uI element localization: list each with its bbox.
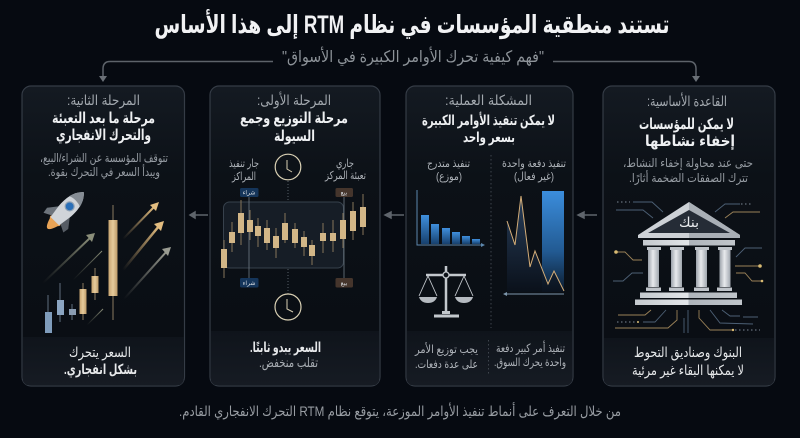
single batch note xyxy=(494,340,566,370)
title: تستند منطقية المؤسسات في نظام RTM إلى هذا الأساس xyxy=(154,9,669,40)
gradual note: على عدة دفعات. xyxy=(415,359,478,371)
label: gradual execution: تنفيذ متدرج xyxy=(427,158,470,170)
tag: sell top: بيع xyxy=(341,190,348,196)
stage one heading xyxy=(240,110,348,145)
stage two label: المرحلة الثانية: xyxy=(67,92,140,109)
chart: single batch spike xyxy=(503,191,564,296)
label: executing positions xyxy=(229,158,259,183)
tag: sell top xyxy=(336,188,353,197)
problem heading xyxy=(422,112,555,146)
stage one footer text: السعر يبدو ثابتًا. xyxy=(250,339,321,356)
consolidation box xyxy=(224,202,344,268)
stage two description: تتوقف المؤسسة عن الشراء/البيع، xyxy=(40,151,168,166)
icon: bottom clock xyxy=(275,294,301,320)
problem footer band xyxy=(407,338,572,385)
stage one footer band xyxy=(211,338,379,385)
arrow: problem to stage one xyxy=(385,212,404,218)
icon: rocket xyxy=(37,182,94,239)
chart: distributed bars xyxy=(417,190,485,247)
foundation footer text: لا يمكنها البقاء غير مرئية xyxy=(632,362,744,379)
foundation description: تترك الصفقات الضخمة أثارًا. xyxy=(629,170,748,186)
stage two description xyxy=(40,151,168,180)
stage two footer band xyxy=(23,343,184,385)
tag: sell bottom xyxy=(336,278,353,288)
stage two heading: مرحلة ما بعد التعبئة xyxy=(52,110,155,127)
chart: range candlesticks xyxy=(221,194,366,278)
problem heading: لا يمكن تنفيذ الأوامر الكبيرة xyxy=(422,112,555,129)
label: executing positions: المراكز xyxy=(231,171,256,183)
panel: foundation xyxy=(603,86,775,386)
bank label: بنك xyxy=(679,214,699,230)
foundation heading: إخفاء نشاطها xyxy=(645,133,735,150)
stage two footer text: بشكل انفجاري. xyxy=(64,361,137,379)
stage two heading xyxy=(52,110,155,145)
label: single batch: تنفيذ دفعة واحدة xyxy=(502,158,566,170)
arrow: stage one to stage two xyxy=(190,212,208,218)
single batch note: تنفيذ أمر كبير دفعة xyxy=(496,340,565,356)
label: gradual execution xyxy=(427,158,470,183)
tag: sell bottom: بيع xyxy=(341,281,348,287)
foundation footer band xyxy=(604,343,774,385)
stage two heading: والتحرك الانفجاري xyxy=(56,127,151,145)
arrow: subtitle to foundation xyxy=(553,62,700,82)
tag: buy top xyxy=(240,188,258,197)
icon: top clock xyxy=(275,154,301,180)
arrow: foundation to problem xyxy=(578,212,597,218)
stage two footer text xyxy=(64,344,137,379)
foundation footer text: البنوك وصناديق التحوط xyxy=(634,344,742,361)
foundation label: القاعدة الأساسية: xyxy=(647,92,727,109)
foundation footer text xyxy=(632,344,744,379)
single batch note: واحدة يحرك السوق. xyxy=(494,357,566,370)
icon: balance scale xyxy=(419,266,473,318)
gradual note xyxy=(414,342,478,371)
panel: practical problem xyxy=(406,86,573,386)
arrow: subtitle to stage two xyxy=(99,62,273,82)
stage two footer text: السعر يتحرك xyxy=(69,344,131,361)
tag: buy bottom: شراء xyxy=(243,280,255,287)
label: single batch xyxy=(502,158,566,183)
gradual note: يجب توزيع الأمر xyxy=(414,342,478,357)
stage two description: ويبدأ السعر في التحرك بقوة. xyxy=(48,164,160,180)
foundation heading xyxy=(639,116,735,150)
label: building position: جاري xyxy=(336,158,354,170)
foundation description: حتى عند محاولة إخفاء النشاط، xyxy=(623,156,753,171)
subtitle: "فهم كيفية تحرك الأوامر الكبيرة في الأسواق" xyxy=(282,46,544,67)
stage one footer text: تقلب منخفض. xyxy=(259,355,318,371)
problem label: المشكلة العملية: xyxy=(445,92,532,108)
label: building position xyxy=(324,158,366,182)
problem heading: بسعر واحد xyxy=(463,129,515,146)
label: building position: تعبئة المركز xyxy=(324,170,366,182)
stage one footer text xyxy=(250,339,321,371)
panel: stage one xyxy=(210,86,380,386)
circuit lines xyxy=(613,202,762,333)
label: single batch: (غير فعال) xyxy=(514,171,554,183)
stage one heading: السيولة xyxy=(274,128,315,145)
label: gradual execution: (موزع) xyxy=(436,171,462,183)
stage one label: المرحلة الأولى: xyxy=(257,91,331,109)
tag: buy top: شراء xyxy=(243,190,255,196)
stage one heading: مرحلة التوزيع وجمع xyxy=(240,110,348,127)
arrows: upward momentum xyxy=(43,202,171,325)
panel: stage two xyxy=(22,86,184,386)
label: executing positions: جار تنفيذ xyxy=(229,158,259,170)
icon: bank building xyxy=(635,202,742,305)
tag: buy bottom xyxy=(240,278,258,288)
foundation heading: لا يمكن للمؤسسات xyxy=(639,116,734,133)
foundation description xyxy=(623,156,753,186)
bottom summary: من خلال التعرف على أنماط تنفيذ الأوامر الموزعة، يتوقع نظام RTM التحرك الانفجاري القادم. xyxy=(179,402,621,420)
chart: explosive candlesticks xyxy=(45,205,118,333)
